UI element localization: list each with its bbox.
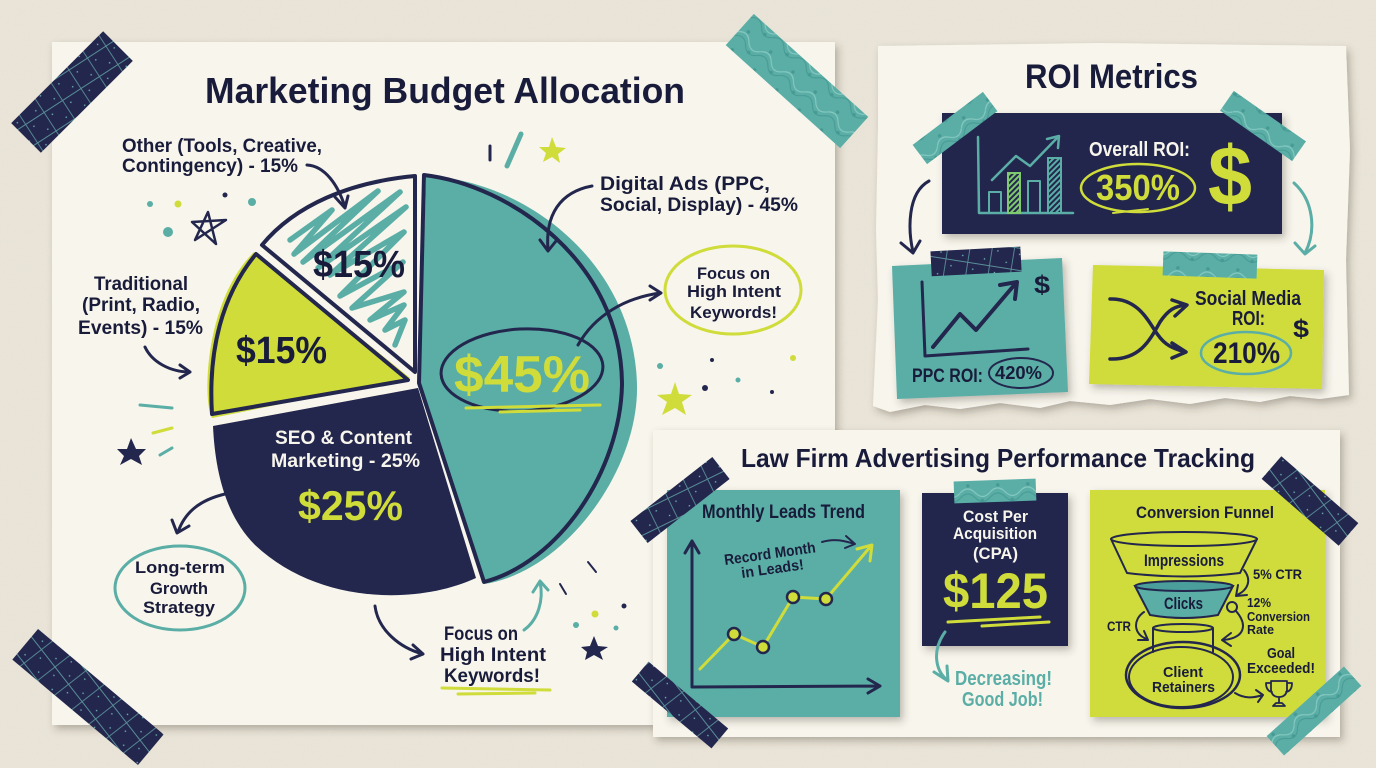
callout: long-term growth strategy: Strategy: [143, 598, 216, 617]
card: cost per acquisition: Cost Per: [963, 507, 1028, 526]
card: social media roi: Social Media: [1195, 288, 1302, 310]
annotation: 5 percent ctr: 5% CTR: [1253, 566, 1302, 582]
tape: law panel top left: [630, 457, 730, 543]
icon: dollar sign: $: [1208, 129, 1252, 223]
tape: law panel bottom right: [1267, 667, 1361, 755]
funnel: impressions: [1111, 532, 1257, 576]
tape: law panel top right: [1262, 456, 1358, 546]
card: monthly leads trend: Monthly Leads Trend: [702, 502, 865, 523]
annotation: decreasing: [934, 632, 1052, 711]
line chart: [685, 541, 880, 693]
card: conversion funnel: Conversion Funnel: [1136, 503, 1274, 522]
annotation: conversion rate: Rate: [1247, 622, 1274, 637]
pie chart: [207, 175, 637, 595]
card: social media roi: ROI:: [1232, 308, 1265, 330]
tape: top left navy: [11, 31, 133, 153]
card: social media roi: $: [1293, 315, 1309, 343]
annotation: record month: [723, 536, 855, 582]
slice: digital ads 45%: [419, 175, 637, 584]
label: other: Contingency) - 15%: [122, 156, 298, 177]
callout: focus on high intent keywords, bottom: Focus on: [444, 624, 518, 645]
annotation: goal exceeded: [1235, 645, 1315, 706]
slice: other 15%: [262, 176, 415, 372]
slice: traditional 15%: [207, 252, 410, 418]
callout: long-term growth strategy: Growth: [150, 579, 208, 598]
card: cost per acquisition: [922, 493, 1068, 646]
callout: long-term growth strategy: [115, 494, 245, 630]
annotation: 5 percent ctr: [1236, 566, 1302, 596]
slice: traditional 15%: $15%: [236, 330, 327, 372]
label: traditional: Traditional: [94, 274, 188, 295]
label: digital ads: [540, 174, 798, 251]
label: traditional: (Print, Radio,: [82, 295, 200, 316]
card: social media roi: [1089, 265, 1324, 389]
heading: Law Firm Advertising Performance Tracking: [741, 443, 1255, 473]
card: cost per acquisition: Acquisition: [953, 524, 1037, 543]
card: monthly leads trend: [667, 490, 900, 717]
label: other: Other (Tools, Creative,: [122, 136, 322, 157]
annotation: ctr: [1107, 612, 1148, 640]
slice: seo and content 25%: [213, 388, 476, 595]
slice: other 15%: $15%: [313, 244, 405, 286]
slice: seo and content 25%: $25%: [298, 482, 403, 529]
card: ppc roi: 420%: [995, 363, 1042, 383]
arrow: to ppc: [901, 181, 929, 253]
callout: focus on high intent keywords, bottom: Keywords!: [444, 666, 540, 687]
tape: bottom left navy: [12, 629, 164, 765]
card: ppc roi: PPC ROI:: [912, 366, 983, 387]
funnel: cylinder: [1153, 624, 1213, 652]
icon: trophy: [1266, 681, 1292, 706]
funnel: client retainers: Retainers: [1152, 679, 1215, 696]
tape: cpa card: [954, 479, 1036, 503]
card: overall roi: [942, 113, 1282, 234]
annotation: decreasing: Decreasing!: [955, 668, 1052, 690]
funnel: clicks: Clicks: [1164, 594, 1203, 613]
callout: long-term growth strategy: Long-term: [135, 558, 225, 577]
tape: ppc card: [930, 247, 1022, 276]
tape: overall left: [913, 92, 997, 164]
label: digital ads: Digital Ads (PPC,: [600, 174, 770, 195]
card: conversion funnel: [1090, 490, 1325, 717]
decorative doodles: [117, 134, 796, 660]
callout: focus on high intent keywords, bottom: High Intent: [440, 645, 547, 666]
label: other: [122, 136, 348, 208]
card: overall roi: Overall ROI:: [1089, 139, 1190, 161]
slice: digital ads 45%: $45%: [454, 346, 590, 404]
annotation: conversion rate: 12%: [1247, 595, 1271, 610]
title: Marketing Budget Allocation: [205, 70, 685, 111]
annotation: record month: Record Month: [723, 539, 817, 569]
annotation: record month: in Leads!: [740, 556, 805, 582]
icon: bar chart: [978, 136, 1073, 213]
funnel: clicks: [1135, 581, 1233, 618]
tape: overall right: [1220, 91, 1306, 161]
callout: focus on high intent keywords, bottom: [375, 581, 550, 694]
card: ppc roi: $: [1034, 271, 1050, 299]
slice: seo and content 25%: Marketing - 25%: [271, 451, 420, 472]
callout: focus on high intent keywords: Focus on: [697, 264, 770, 283]
card: cost per acquisition: $125: [943, 563, 1048, 619]
callout: focus on high intent keywords: [578, 246, 801, 345]
label: traditional: Events) - 15%: [78, 318, 203, 339]
card: overall roi: 350%: [1096, 167, 1180, 208]
heading: ROI Metrics: [1025, 58, 1198, 96]
annotation: ctr: CTR: [1107, 618, 1131, 634]
arrow: to social: [1294, 183, 1315, 254]
slice: seo and content 25%: SEO & Content: [275, 428, 413, 449]
annotation: goal exceeded: Exceeded!: [1247, 660, 1315, 677]
card: ppc roi: [892, 258, 1068, 399]
card: cost per acquisition: (CPA): [973, 544, 1018, 563]
panel: roi metrics: [873, 43, 1350, 412]
callout: focus on high intent keywords: Keywords!: [690, 303, 777, 322]
funnel: client retainers: Client: [1163, 664, 1203, 681]
funnel: impressions: Impressions: [1144, 551, 1224, 570]
annotation: decreasing: Good Job!: [962, 689, 1043, 711]
panel: law firm advertising performance tracking: [653, 430, 1340, 737]
label: traditional: [78, 274, 203, 378]
label: digital ads: Social, Display) - 45%: [600, 195, 798, 216]
tape: top right teal: [726, 14, 868, 148]
card: social media roi: 210%: [1213, 337, 1280, 370]
funnel: client retainers: [1126, 642, 1240, 708]
tape: law panel bottom left: [632, 662, 728, 748]
annotation: conversion rate: [1222, 595, 1310, 646]
callout: focus on high intent keywords: High Intent: [687, 282, 781, 301]
annotation: goal exceeded: Goal: [1267, 645, 1295, 662]
annotation: conversion rate: Conversion: [1247, 609, 1310, 624]
panel: marketing budget allocation: [52, 42, 835, 725]
tape: social card: [1163, 251, 1257, 279]
